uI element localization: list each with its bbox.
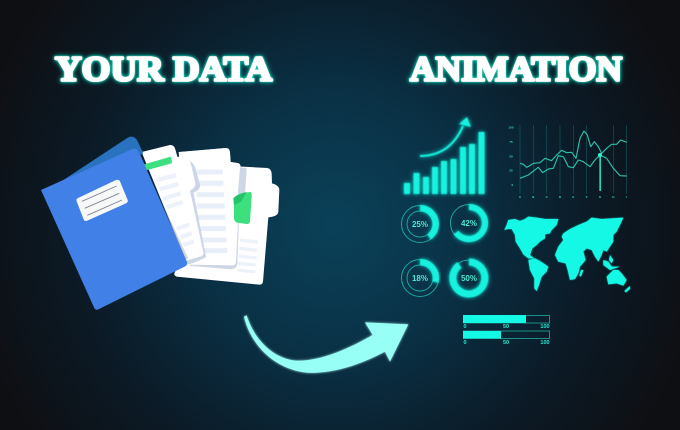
progress bar 1: 100 <box>540 324 550 330</box>
progress bar 2: 50 <box>503 340 509 346</box>
new zealand <box>624 286 630 292</box>
donut: 18%: 18% <box>412 274 428 283</box>
folder label <box>76 180 128 221</box>
donut: 18% <box>402 260 438 296</box>
y axis labels: 50 <box>509 154 513 158</box>
x axis labels: E <box>572 195 574 199</box>
x axis labels: D <box>559 195 562 199</box>
document: left page <box>142 145 206 264</box>
australia <box>607 270 627 286</box>
title: your data: YOUR DATA <box>55 50 273 88</box>
donut: 50% <box>451 260 487 296</box>
folder shadow <box>137 152 188 263</box>
progress bar 2: 0 <box>463 340 467 346</box>
world map <box>504 217 630 292</box>
progress bar 1: 0 <box>463 324 467 330</box>
donut: 25% <box>402 206 438 242</box>
right page divider tab <box>233 167 252 224</box>
x axis labels: H <box>612 195 614 199</box>
y axis labels: 75 <box>509 140 513 144</box>
y axis labels: 100 <box>509 126 514 130</box>
donut: 42%: 42% <box>461 219 477 228</box>
document: middle page <box>179 148 241 269</box>
folder front <box>41 149 187 310</box>
x axis labels: I <box>626 195 627 199</box>
icon: folder with documents <box>41 137 279 310</box>
growth arrow <box>420 126 463 156</box>
progress bar 2 <box>463 331 550 346</box>
line series <box>520 131 627 167</box>
progress bar 1 <box>463 315 550 330</box>
x axis labels: G <box>599 195 602 199</box>
donut: 42% <box>450 204 488 242</box>
title: animation: ANIMATION <box>410 50 622 88</box>
x axis labels <box>519 195 627 199</box>
progress bar 1: 50 <box>503 324 509 330</box>
arrow: data to animation <box>244 315 408 373</box>
north america <box>504 217 558 258</box>
x axis labels: F <box>586 195 588 199</box>
y axis labels: 0 <box>511 183 513 187</box>
y axis labels <box>509 126 514 187</box>
folder back <box>63 137 143 190</box>
y axis labels: 25 <box>509 169 513 173</box>
eurasia and africa <box>555 218 623 280</box>
madagascar <box>579 270 583 277</box>
document: right page <box>174 166 279 285</box>
progress bar 2: 100 <box>540 340 550 346</box>
bar chart with growth arrow <box>404 117 484 194</box>
x axis labels: B <box>532 195 535 199</box>
southeast asia islands <box>603 255 620 270</box>
line chart <box>509 125 627 199</box>
south america <box>528 258 548 291</box>
x axis labels: A <box>519 195 522 199</box>
x axis labels: C <box>546 195 549 199</box>
highlight marker <box>599 155 601 191</box>
donut: 50%: 50% <box>461 274 477 283</box>
donut: 25%: 25% <box>412 220 428 229</box>
